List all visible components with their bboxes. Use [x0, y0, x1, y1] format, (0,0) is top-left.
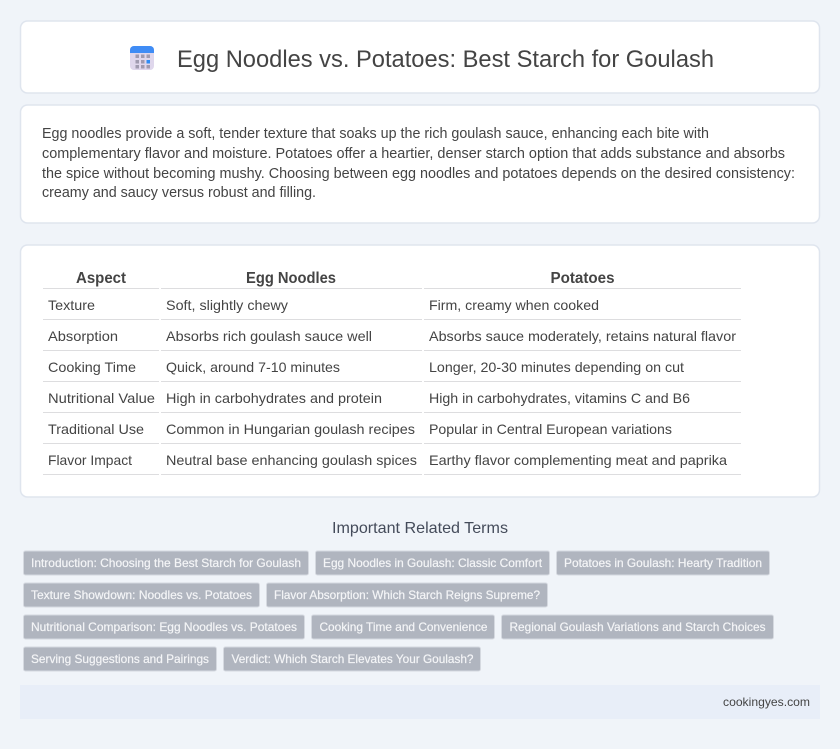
- table row: traditional use: Popular in Central European variations: [429, 421, 672, 437]
- table row: absorption: Absorption: [48, 328, 118, 344]
- table row: texture: Firm, creamy when cooked: [429, 297, 599, 313]
- table header: Egg Noodles: [246, 270, 336, 287]
- table row: flavor impact: Flavor Impact: [48, 452, 132, 468]
- tag: [556, 551, 770, 575]
- table header: [76, 270, 615, 287]
- text block: introduction: the spice without becoming mushy. Choosing between egg noodles and potatoes depends on the desired consistency:: [42, 166, 795, 182]
- tag: Verdict: Which Starch Elevates Your Goulash?: [232, 652, 474, 666]
- table row: flavor impact: [48, 452, 727, 468]
- table row: cooking time: [48, 359, 684, 375]
- tag: Serving Suggestions and Pairings: [31, 652, 209, 666]
- tag: Nutritional Comparison: Egg Noodles vs. Potatoes: [31, 620, 297, 634]
- table row: texture: [48, 297, 599, 313]
- table row lines: [43, 288, 741, 474]
- table row: cooking time: Longer, 20-30 minutes depending on cut: [429, 359, 684, 375]
- tag: [502, 615, 774, 639]
- tag: Flavor Absorption: Which Starch Reigns Supreme?: [274, 588, 540, 602]
- tag: Egg Noodles in Goulash: Classic Comfort: [323, 556, 543, 570]
- panel: comparison table: [20, 245, 820, 497]
- footer source text: cookingyes.com: [723, 695, 810, 709]
- table row: traditional use: Traditional Use: [48, 421, 144, 437]
- table row: flavor impact: Earthy flavor complementing meat and paprika: [429, 452, 727, 468]
- tag: Texture Showdown: Noodles vs. Potatoes: [31, 588, 252, 602]
- table row: cooking time: Quick, around 7-10 minutes: [166, 359, 340, 375]
- heading: important related terms: Important Related Terms: [332, 520, 508, 537]
- table row: absorption: Absorbs rich goulash sauce well: [166, 328, 372, 344]
- tag: [316, 551, 550, 575]
- table header: Aspect: [76, 270, 127, 287]
- table row: absorption: Absorbs sauce moderately, retains natural flavor: [429, 328, 736, 344]
- tag: [24, 615, 304, 639]
- table row: texture: Soft, slightly chewy: [166, 297, 288, 313]
- icon: calendar: [130, 46, 154, 70]
- table row: nutritional value: [48, 390, 690, 406]
- tag: [24, 583, 260, 607]
- tag: [224, 647, 480, 671]
- tag: Regional Goulash Variations and Starch Choices: [510, 620, 766, 634]
- table row: absorption: [48, 328, 736, 344]
- text block: introduction: creamy and saucy versus robust and filling.: [42, 185, 316, 201]
- panel: page header: [20, 21, 820, 93]
- tag: [24, 647, 216, 671]
- table row: nutritional value: High in carbohydrates, vitamins C and B6: [429, 390, 690, 406]
- table header: Potatoes: [550, 270, 615, 287]
- title: Egg Noodles vs. Potatoes: Best Starch for Goulash: [177, 46, 714, 73]
- table row: nutritional value: High in carbohydrates and protein: [166, 390, 382, 406]
- footer bar: [20, 685, 820, 719]
- table row: traditional use: [48, 421, 672, 437]
- table row: texture: Texture: [48, 297, 95, 313]
- tag: [24, 551, 308, 575]
- tag: [312, 615, 494, 639]
- table row: cooking time: Cooking Time: [48, 359, 136, 375]
- tag: Potatoes in Goulash: Hearty Tradition: [564, 556, 762, 570]
- table row: nutritional value: Nutritional Value: [48, 390, 155, 406]
- tag: Introduction: Choosing the Best Starch for Goulash: [31, 556, 301, 570]
- panel: introduction text: [20, 105, 820, 223]
- table row: flavor impact: Neutral base enhancing goulash spices: [166, 452, 417, 468]
- tag: [266, 583, 548, 607]
- table row: traditional use: Common in Hungarian goulash recipes: [166, 421, 415, 437]
- text block: introduction: Egg noodles provide a soft, tender texture that soaks up the rich goulash sauce, enhancing each bite with: [42, 126, 709, 142]
- text block: introduction: complementary flavor and moisture. Potatoes offer a heartier, denser starch option that adds substance and absorbs: [42, 146, 785, 162]
- text block: introduction: [42, 126, 795, 201]
- tag: Cooking Time and Convenience: [320, 620, 488, 634]
- tag list: [24, 551, 774, 671]
